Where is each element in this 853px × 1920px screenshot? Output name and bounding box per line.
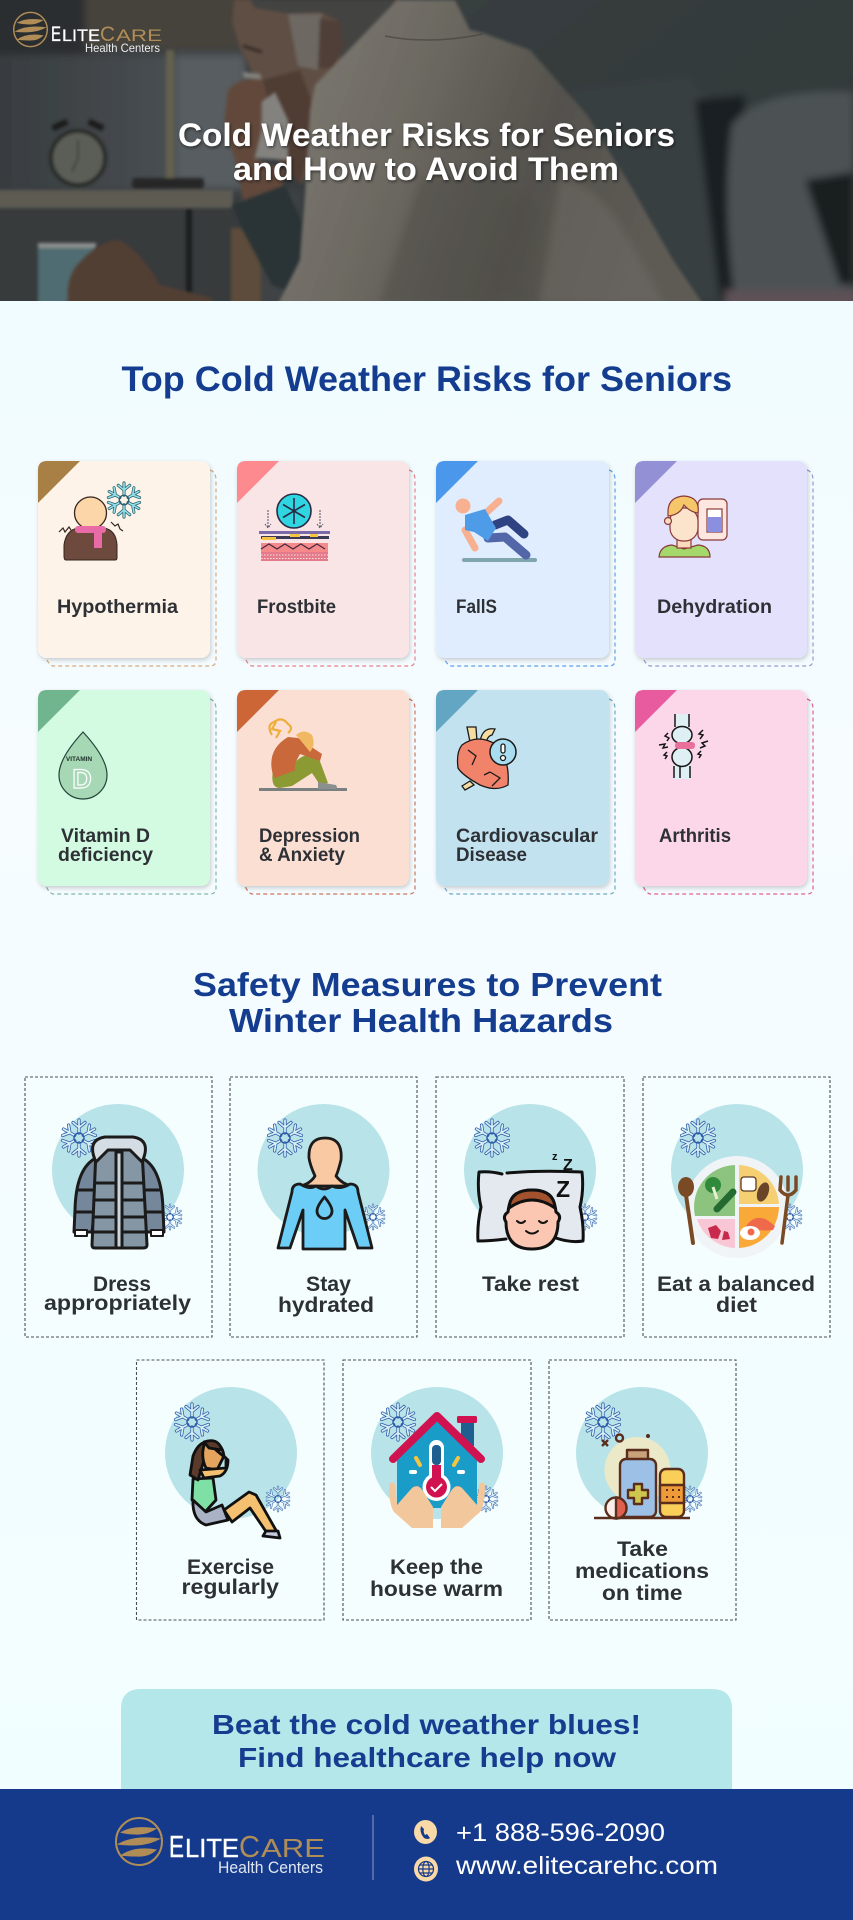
icon: medicine bottles and pill [594, 1434, 690, 1518]
icon: heart with alert [458, 727, 516, 790]
label: medications [575, 1560, 709, 1583]
label: deficiency [58, 845, 153, 866]
icon: vitamin D drop: VITAMIN [66, 756, 92, 763]
head and neck [232, 0, 400, 185]
label: Dress [93, 1273, 151, 1296]
label: on time [602, 1582, 682, 1605]
label: FallS [456, 597, 497, 618]
section heading: safety measures: Winter Health Hazards [229, 1002, 613, 1039]
footer logo: C [239, 1829, 260, 1864]
icon: sleeping face on pillow: z [552, 1151, 558, 1163]
icon: phone [414, 1820, 437, 1844]
label [182, 1556, 279, 1599]
panel: Depression & Anxiety [237, 690, 415, 894]
label: hydrated [278, 1294, 374, 1317]
label: & Anxiety [259, 845, 345, 866]
call to action panel [121, 1689, 732, 1789]
panel: Hypothermia [38, 461, 216, 666]
label: Take rest [482, 1273, 579, 1296]
icon: thirsty person with glass [659, 496, 727, 557]
icon: sleeping face on pillow [478, 1151, 583, 1249]
icon: body with water drop [278, 1138, 372, 1249]
icon: warm house with thermometer [389, 1416, 485, 1528]
icon: sad seated person [259, 719, 347, 791]
icon: vitamin D drop [59, 732, 107, 799]
call to action text [212, 1709, 641, 1773]
icon: falling person [456, 498, 537, 562]
icon: balanced plate with spoon and fork [678, 1156, 796, 1258]
label: Hypothermia [57, 597, 178, 618]
panel: Falls [436, 461, 615, 666]
label: Stay [306, 1273, 351, 1296]
hand on mug [62, 240, 212, 305]
label: diet [716, 1294, 757, 1317]
label: Vitamin D [61, 826, 150, 847]
icon: sleeping face on pillow: Z [556, 1176, 570, 1202]
label [370, 1556, 503, 1601]
label [58, 826, 153, 866]
panel: Take rest [436, 1077, 624, 1337]
icon: sleeping face on pillow: Z [563, 1157, 573, 1174]
label: Keep the [390, 1556, 483, 1579]
panel: Stay hydrated [230, 1077, 417, 1337]
footer logo: LITE [185, 1833, 239, 1863]
panel: Dress appropriately [25, 1077, 212, 1337]
footer logo [116, 1818, 325, 1877]
panel: Take medications on time [549, 1360, 736, 1620]
section heading: risks: Top Cold Weather Risks for Seniors [122, 360, 732, 399]
header logo [14, 12, 162, 55]
phone number: +1 888-596-2090 [456, 1819, 665, 1847]
label: house warm [370, 1578, 503, 1601]
footer band [0, 1789, 853, 1920]
panel: Cardiovascular Disease [436, 690, 615, 894]
section heading: safety measures [193, 966, 662, 1039]
panel: Arthritis [635, 690, 813, 894]
label [575, 1538, 709, 1605]
icon: shivering person [59, 483, 142, 560]
blanket [278, 0, 703, 304]
header logo: Health Centers [85, 41, 160, 55]
icon: winter coat [74, 1137, 164, 1248]
panel: Dehydration [635, 461, 813, 666]
hand and tissue [224, 72, 288, 210]
panel: Exercise regularly [136, 1360, 324, 1620]
label [259, 826, 360, 866]
call to action text: Find healthcare help now [238, 1742, 616, 1773]
hero photo banner [0, 0, 853, 311]
panel: Keep the house warm [343, 1360, 531, 1620]
sleeve [232, 185, 302, 295]
icon: vitamin D drop: D [72, 764, 92, 794]
label: Exercise [187, 1556, 274, 1579]
website: www.elitecarehc.com [455, 1852, 718, 1880]
label: Depression [259, 826, 360, 847]
icon: arthritic knee joint [659, 714, 708, 779]
label: Frostbite [257, 597, 336, 618]
panel: Frostbite [237, 461, 415, 666]
label: Take [617, 1538, 668, 1561]
footer logo: Health Centers [218, 1858, 323, 1877]
label: Dehydration [657, 597, 772, 618]
label: Arthritis [659, 826, 731, 847]
panel: Vitamin D deficiency [38, 690, 216, 894]
section heading: safety measures: Safety Measures to Prevent [193, 966, 662, 1003]
label: Cardiovascular [456, 826, 599, 847]
header logo: ARE [116, 26, 162, 45]
header logo: E [51, 23, 61, 46]
hero title: Cold Weather Risks for Seniors [178, 117, 675, 153]
header logo: C [100, 23, 115, 46]
label [44, 1273, 191, 1315]
header logo: LITE [62, 26, 100, 45]
label: regularly [182, 1576, 279, 1599]
label: Disease [456, 845, 527, 866]
hero title: and How to Avoid Them [233, 151, 619, 187]
panel: Eat a balanced diet [643, 1077, 830, 1337]
icon: frostbite skin layers [259, 494, 330, 561]
label: appropriately [44, 1292, 191, 1315]
footer logo: E [169, 1829, 184, 1864]
icon: person doing sit-ups [190, 1441, 280, 1538]
icon: globe [414, 1856, 438, 1882]
call to action text: Beat the cold weather blues! [212, 1709, 641, 1740]
hero title [178, 117, 675, 187]
label [278, 1273, 374, 1317]
footer logo: ARE [261, 1833, 325, 1863]
label [657, 1273, 815, 1317]
label [456, 826, 599, 866]
label: Eat a balanced [657, 1273, 815, 1296]
